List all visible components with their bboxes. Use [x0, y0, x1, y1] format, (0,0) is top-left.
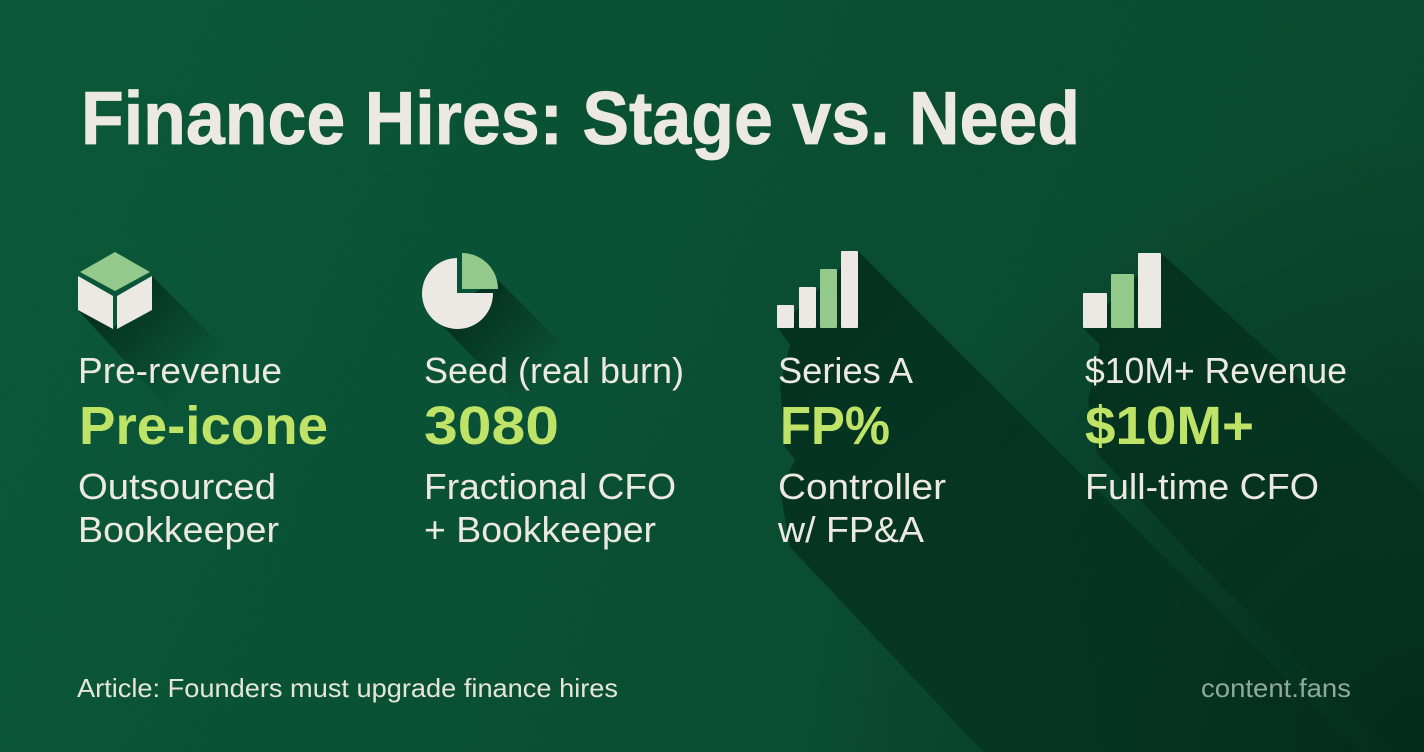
hire recommendation — [424, 466, 676, 550]
hire recommendation — [78, 466, 279, 550]
title: Finance Hires: Stage vs. Need — [81, 76, 1080, 160]
column: pre-revenue — [78, 252, 328, 550]
footer: source: content.fans — [1201, 673, 1351, 703]
footer: article line: Article: Founders must upgrade finance hires — [77, 673, 618, 703]
stage value: 3080 — [424, 396, 559, 456]
icon: pie chart — [422, 253, 498, 329]
long shadow: cube icon — [78, 276, 262, 410]
hire recommendation: Bookkeeper — [78, 509, 279, 550]
hire recommendation: + Bookkeeper — [424, 509, 656, 550]
stage label: Pre-revenue — [78, 350, 282, 391]
hire recommendation: Fractional CFO — [424, 466, 676, 507]
stage label: Seed (real burn) — [424, 350, 684, 391]
hire recommendation: w/ FP&A — [777, 509, 924, 550]
icon: cube — [78, 252, 152, 329]
stage value: Pre-icone — [79, 396, 328, 456]
column: $10M+ revenue — [1083, 253, 1347, 507]
hire recommendation — [777, 466, 946, 550]
hire recommendation: Outsourced — [78, 466, 276, 507]
icon: three-bar chart — [1083, 253, 1161, 328]
column: seed — [422, 253, 684, 550]
hire recommendation: Controller — [778, 466, 946, 507]
column: series A — [777, 251, 946, 550]
stage label: $10M+ Revenue — [1085, 350, 1347, 391]
long shadow: pie icon — [432, 280, 590, 395]
stage value: $10M+ — [1085, 396, 1254, 456]
stage value: FP% — [780, 396, 890, 456]
hire recommendation: Full-time CFO — [1085, 466, 1319, 507]
stage label: Series A — [778, 350, 913, 391]
long shadow: series A bars — [778, 251, 1359, 752]
icon: four-bar chart — [777, 251, 858, 328]
long shadow: revenue bars — [1083, 253, 1424, 752]
